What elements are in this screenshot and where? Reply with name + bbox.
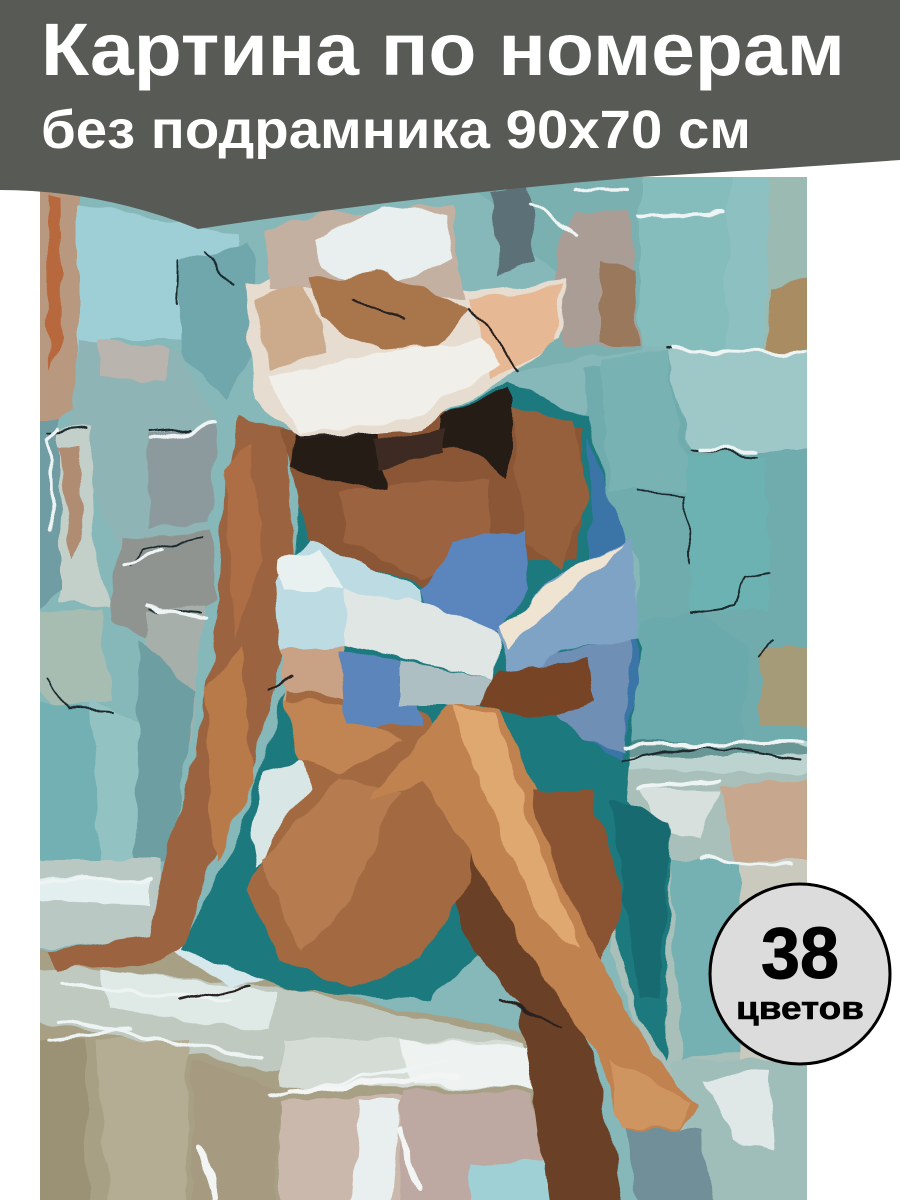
painting figure: hips and thigh — [250, 690, 480, 985]
painting figure: hand under book — [480, 660, 595, 722]
painting figure: lower leg behind — [450, 840, 625, 1200]
painting figure: hat — [245, 205, 565, 438]
painting figure: open book — [340, 540, 638, 750]
badge number: 38 — [761, 914, 839, 994]
painting figure: dark shadow behind the woman — [180, 380, 670, 1060]
painting figure: arm and shoulder on left — [45, 415, 295, 970]
badge: 38 colours — [710, 884, 890, 1064]
painting figure: dark hair — [290, 385, 510, 490]
painting background: lower right — [610, 768, 807, 1200]
painting background: right wall — [585, 350, 830, 775]
painting: woman reading — [40, 177, 807, 1200]
painting background: upper right wall — [479, 177, 807, 372]
subtitle: без подрамника 90х70 см — [41, 100, 751, 160]
painting figure: torso — [280, 405, 588, 590]
painting figure: top and bra — [275, 530, 530, 705]
painting background: seat — [40, 930, 550, 1200]
painting background: left wall — [40, 192, 256, 950]
painting strokes: dark and white palette-knife marks — [20, 190, 805, 1200]
painting figure: crossed leg and foot — [370, 700, 697, 1130]
badge label: цветов — [736, 990, 864, 1026]
title: Картина по номерам — [41, 8, 845, 91]
painting figure: white shorts — [250, 760, 312, 868]
header banner — [0, 0, 900, 229]
